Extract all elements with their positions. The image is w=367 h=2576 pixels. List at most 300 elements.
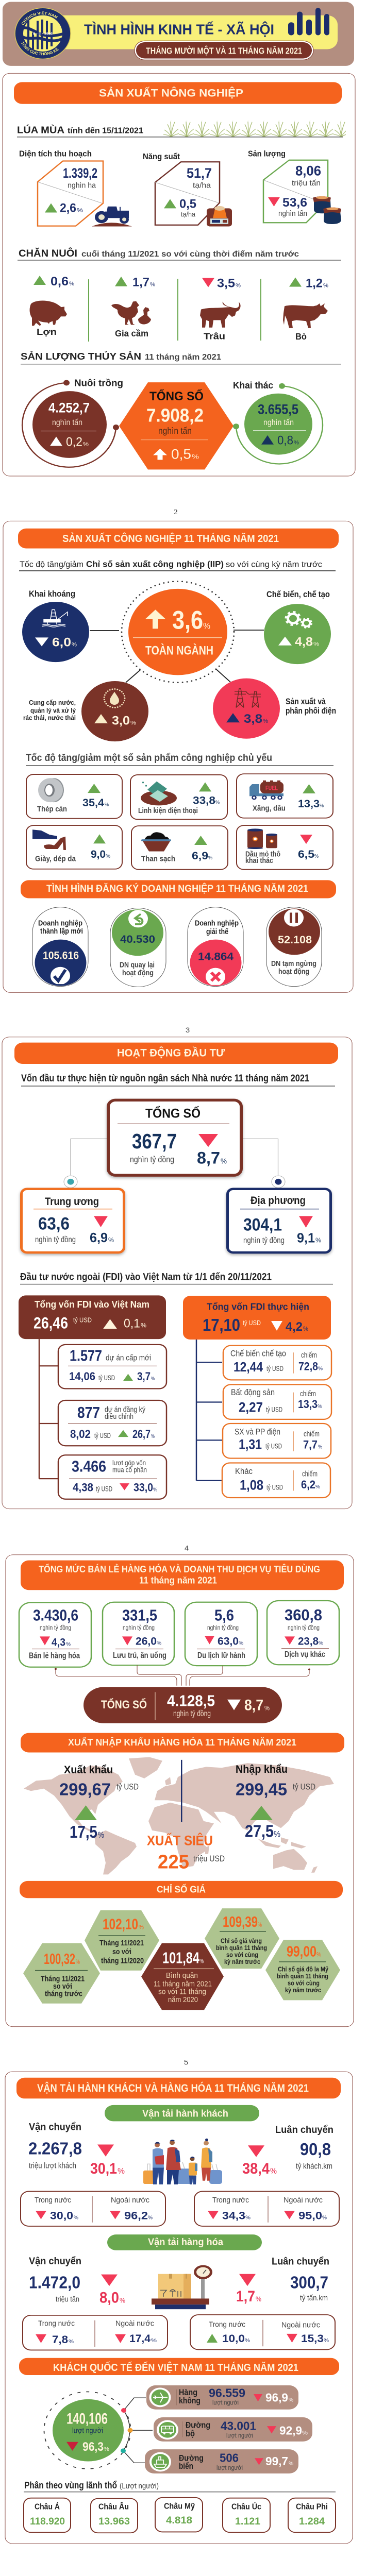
passenger carried: Vận chuyển	[29, 2122, 81, 2132]
FDI card: capital contributions: mua cổ phần	[112, 1466, 147, 1474]
heading: price index	[20, 1881, 343, 1898]
product: crude oil	[237, 825, 333, 870]
icon: cross mark	[206, 968, 225, 985]
product: petroleum: %	[320, 803, 324, 809]
retail card: tourism: 5,6	[214, 1606, 234, 1624]
circle: total visitors: %	[104, 2446, 109, 2452]
livestock: poultry: %	[150, 282, 155, 287]
box: passenger carried breakdown: 96,2	[124, 2209, 148, 2222]
hexagon: USD price: bình quân 11 tháng	[277, 1973, 328, 1980]
retail card: other services: %	[319, 1641, 323, 1646]
total pill: 4.128,5	[167, 1692, 215, 1709]
card: central: 6,9	[90, 1230, 108, 1245]
retail card: accommodation: %	[157, 1641, 161, 1646]
header: realised FDI: %	[303, 1325, 308, 1332]
retail card: accommodation: Lưu trú, ăn uống	[113, 1651, 166, 1660]
subtitle pill	[135, 41, 313, 60]
passenger traffic: tỷ khách.km	[296, 2162, 332, 2171]
circle: total visitors: 96,3	[82, 2440, 104, 2454]
icon: shoes	[32, 829, 66, 850]
heading: international visitors: KHÁCH QUỐC TẾ ĐẾN VIỆT NAM 11 THÁNG NĂM 2021	[53, 2361, 298, 2374]
hexagon: gold price: bình quân 11 tháng	[216, 1944, 267, 1952]
freight carried: triệu tấn	[56, 2295, 79, 2304]
connector node right	[272, 1176, 285, 1188]
header: total FDI: 0,1	[124, 1317, 140, 1330]
capture fisheries circle: Khai thác	[233, 381, 273, 391]
icon: plane	[149, 2387, 171, 2407]
product: leather footwear: Giày, dép da	[35, 855, 76, 863]
card: local: 304,1	[243, 1214, 282, 1234]
retail card: other services	[267, 1601, 339, 1665]
heading: fisheries: 11 tháng năm 2021	[145, 353, 221, 362]
card: output: 53,6	[282, 196, 307, 209]
card: output: triệu tấn	[292, 179, 321, 188]
FDI sector: other	[222, 1463, 330, 1498]
capsule: dissolved enterprises: giải thể	[206, 928, 228, 936]
circle: water and waste: 3,0	[112, 714, 130, 727]
exports	[59, 1763, 139, 1842]
capsule: re-activated enterprises	[110, 908, 166, 987]
product: rolled steel: 35,4	[82, 796, 104, 809]
heading: agriculture: SẢN XUẤT NÔNG NGHIỆP	[99, 86, 243, 99]
product: leather footwear: %	[106, 854, 110, 859]
capture fisheries circle: %	[294, 440, 299, 446]
center circle: whole industry: TOÀN NGÀNH	[145, 643, 213, 657]
product: petroleum	[237, 774, 333, 818]
passenger carried: %	[118, 2167, 125, 2176]
hexagon: CPI average: 11 tháng năm 2021	[154, 1980, 212, 1988]
passenger traffic: Luân chuyển	[275, 2124, 333, 2136]
region: America: Châu Mỹ	[164, 2502, 195, 2511]
title: TÌNH HÌNH KINH TẾ - XÃ HỘI	[84, 21, 274, 38]
pill: freight transport: Vận tải hàng hóa	[148, 2236, 223, 2248]
icon: statistics office logo: TỔNG CỤC THỐNG KÊ	[21, 41, 59, 56]
livestock: cattle: Bò	[295, 332, 307, 342]
icon: bar chart	[288, 8, 329, 35]
circle: electricity: %	[263, 719, 268, 724]
card: output: Sản lượng	[248, 149, 286, 158]
FDI sector: real estate	[223, 1384, 331, 1419]
freight carried: 1.472,0	[29, 2273, 80, 2292]
circle: mining: Khai khoáng	[29, 589, 75, 599]
capsule: re-activated enterprises: hoạt động	[122, 969, 154, 977]
capsule: suspended enterprises	[266, 907, 322, 987]
hexagon: USD price: %	[316, 1951, 321, 1958]
region: Africa: 1.284	[299, 2516, 325, 2527]
livestock: poultry: 1,7	[132, 276, 149, 289]
bar: air: Hàng	[179, 2388, 197, 2397]
livestock: pigs	[30, 275, 74, 337]
box: passenger traffic breakdown: %	[322, 2215, 327, 2221]
region: Africa: Châu Phi	[296, 2502, 328, 2511]
FDI sector: electricity: tỷ USD	[265, 1443, 282, 1450]
heading: business registration: TÌNH HÌNH ĐĂNG KÝ DOANH NGHIỆP 11 THÁNG NĂM 2021	[46, 883, 308, 894]
FDI card: capital contributions	[58, 1455, 166, 1499]
retail card: other services: 360,8	[285, 1606, 322, 1623]
heading: industry: SẢN XUẤT CÔNG NGHIỆP 11 THÁNG NĂM 2021	[62, 532, 279, 545]
circle: electricity: phân phối điện	[286, 706, 336, 716]
center circle: whole industry	[122, 581, 234, 683]
circle: manufacturing: %	[313, 641, 319, 647]
heading: fisheries	[21, 350, 341, 364]
capsule: new enterprises	[32, 907, 88, 987]
freight traffic: Luân chuyển	[272, 2256, 329, 2267]
heading: livestock	[18, 247, 341, 261]
heading: by region	[24, 2481, 336, 2492]
heading: business registration	[21, 880, 336, 899]
header: realised FDI: tỷ USD	[243, 1319, 261, 1327]
trade surplus	[147, 1833, 225, 1873]
page number 4: 4	[185, 1545, 189, 1553]
FDI card: adjusted projects: điều chỉnh	[105, 1413, 134, 1421]
total pill: nghìn tỷ đồng	[173, 1709, 211, 1718]
imports: tỷ USD	[293, 1782, 315, 1791]
FDI sector: real estate: 13,3	[298, 1398, 318, 1411]
subtitle: IIP: Chỉ số sản xuất công nghiệp (IIP)	[86, 560, 224, 569]
FDI card: new projects: 1.577	[70, 1347, 102, 1364]
icon: buffalo	[200, 301, 241, 328]
hexagon: CPI month on month: %	[76, 1959, 80, 1965]
product: petroleum: Xăng, dầu	[253, 804, 286, 812]
box: passenger traffic breakdown: 34,3	[222, 2209, 245, 2222]
card: output	[248, 149, 341, 224]
FDI sector: real estate: tỷ USD	[266, 1406, 282, 1414]
box: freight traffic breakdown: Ngoài nước	[281, 2321, 320, 2329]
retail card: accommodation	[103, 1602, 174, 1665]
imports: Nhập khẩu	[236, 1762, 288, 1775]
freight carried: 8,0	[99, 2289, 119, 2306]
bar: road: bộ	[186, 2429, 195, 2438]
FDI sector: electricity: %	[318, 1445, 322, 1450]
card: total investment: 8,7	[197, 1149, 220, 1167]
bar: road: 43.001	[221, 2419, 256, 2433]
region: Europe	[91, 2499, 138, 2533]
total pill	[84, 1687, 282, 1723]
header: total FDI: Tổng vốn FDI vào Việt Nam	[35, 1299, 149, 1310]
FDI sector: electricity: 7,7	[303, 1438, 318, 1451]
livestock: buffalo: %	[236, 283, 241, 289]
card: local: 9,1	[297, 1230, 315, 1245]
FDI sector: real estate: %	[318, 1404, 322, 1410]
retail card: goods: 3.430,6	[33, 1606, 78, 1624]
product: phone components: Linh kiện điện thoại	[138, 807, 198, 815]
livestock: pigs: %	[69, 281, 74, 287]
heading: retail	[21, 1561, 344, 1590]
total hexagon: 0,5	[171, 447, 191, 462]
passenger traffic	[242, 2124, 333, 2177]
FDI card: adjusted projects	[58, 1400, 166, 1446]
icon: parcel on platform scale	[152, 2265, 212, 2309]
FDI sector: electricity: SX và PP điện	[235, 1427, 280, 1436]
total hexagon: %	[192, 453, 199, 461]
card: yield: 51,7	[187, 165, 212, 181]
livestock: buffalo: Trâu	[204, 331, 225, 341]
passenger carried	[28, 2122, 125, 2177]
trade surplus: triệu USD	[193, 1854, 225, 1863]
card: total investment	[108, 1100, 241, 1175]
FDI sector: other: 1,08	[240, 1478, 263, 1493]
product: leather footwear: 9,0	[91, 848, 106, 860]
circle: manufacturing: Chế biến, chế tạo	[266, 590, 330, 599]
header: total FDI: %	[141, 1322, 146, 1329]
capsule: dissolved enterprises: Doanh nghiệp	[195, 919, 239, 927]
card: yield: 0,5	[179, 197, 196, 211]
exports: 17,5	[70, 1823, 97, 1842]
hexagon: gold price: 109,39	[223, 1914, 258, 1930]
hexagon: CPI month on month: tháng trước	[45, 1990, 82, 1998]
passenger traffic: 90,8	[300, 2140, 331, 2159]
bar: road: 92,9	[279, 2424, 302, 2437]
pill: passenger transport: Vận tải hành khách	[142, 2108, 228, 2119]
circle: manufacturing	[264, 590, 331, 664]
retail card: tourism: Du lịch lữ hành	[197, 1651, 245, 1660]
retail card: tourism: nghìn tỷ đồng	[207, 1624, 239, 1632]
livestock: pigs: 0,6	[51, 275, 69, 289]
connector lines	[123, 2398, 153, 2463]
aquaculture circle: 0,2	[66, 435, 82, 449]
FDI card: capital contributions: 4,38	[73, 1481, 93, 1494]
hexagon: CPI year on year: tháng 11/2020	[101, 1957, 144, 1965]
capsule: new enterprises: 105.616	[43, 949, 79, 961]
heading: industry	[18, 529, 339, 548]
icon: coal bowl	[141, 832, 171, 852]
hexagon: CPI year on year: %	[139, 1924, 144, 1930]
FDI card: adjusted projects: dự án đăng ký	[105, 1405, 145, 1414]
capsule: re-activated enterprises: DN quay lại	[120, 961, 155, 969]
aquaculture circle: 4.252,7	[48, 400, 90, 416]
bar: air: lượt người	[212, 2399, 239, 2406]
exports: tỷ USD	[116, 1782, 139, 1791]
product: rolled steel: %	[105, 803, 109, 808]
product: phone components	[130, 775, 227, 819]
livestock: cattle: 1,2	[306, 277, 323, 290]
bar: sea: Đường	[179, 2453, 204, 2463]
box: passenger traffic breakdown: Trong nước	[212, 2196, 249, 2205]
panel: investment	[2, 1037, 352, 1509]
hexagon: CPI average: %	[200, 1958, 204, 1964]
circle: mining: %	[72, 642, 77, 648]
subtitle pill: THÁNG MƯỜI MỘT VÀ 11 THÁNG NĂM 2021	[146, 45, 302, 56]
icon: return arrow	[128, 910, 148, 927]
product: rolled steel: Thép cán	[37, 805, 67, 814]
imports: %	[274, 1829, 280, 1839]
bar: sea: 99,7	[265, 2455, 288, 2468]
retail card: goods	[19, 1603, 91, 1667]
FDI sector: real estate: Bất động sản	[231, 1388, 275, 1397]
circle: total visitors	[44, 2392, 131, 2469]
FDI sector: manufacturing: 12,44	[233, 1359, 263, 1375]
hexagon: CPI year on year: Tháng 11/2021	[99, 1939, 144, 1947]
icon: rice sacks	[313, 196, 341, 224]
hexagon: USD price	[265, 1940, 340, 2000]
card: total investment: %	[221, 1157, 227, 1165]
capsule: re-activated enterprises: 40.530	[120, 933, 155, 945]
circle: mining	[22, 589, 89, 662]
capsule: new enterprises: Doanh nghiệp	[38, 919, 82, 927]
icon: statistics office logo: CHXHCN VIỆT NAM	[22, 11, 58, 25]
panel: agriculture	[3, 73, 355, 476]
retail card: tourism: %	[239, 1641, 243, 1646]
FDI sector: manufacturing: tỷ USD	[266, 1365, 283, 1373]
circle: water and waste: Cung cấp nước,	[29, 699, 76, 706]
card: yield	[143, 152, 232, 226]
bar: air: 96.559	[209, 2387, 245, 2400]
total pill: TỔNG SỐ	[101, 1698, 147, 1711]
hexagon: USD price: kỳ năm trước	[285, 1987, 321, 1994]
region: Oceania: Châu Úc	[231, 2502, 261, 2511]
FDI card: capital contributions: 3.466	[72, 1458, 106, 1475]
bar: road: Đường	[186, 2421, 210, 2430]
card: central: %	[108, 1236, 114, 1244]
icon: water drop	[104, 689, 125, 707]
bar: air: không	[179, 2396, 201, 2405]
hexagon: CPI month on month: so với	[53, 1982, 72, 1991]
aquaculture circle	[22, 378, 123, 467]
product: crude oil: khai thác	[245, 857, 273, 865]
FDI card: new projects	[58, 1345, 166, 1388]
card: total investment: 367,7	[132, 1130, 177, 1153]
region: Africa	[288, 2498, 336, 2532]
pill: freight transport	[107, 2234, 262, 2250]
hexagon: gold price: %	[258, 1922, 262, 1928]
panel: trade and prices	[6, 1555, 354, 2027]
panel: industry	[3, 521, 353, 992]
circle: total visitors: lượt người	[72, 2427, 103, 2435]
exports: 299,67	[59, 1780, 111, 1799]
retail card: other services: 23,8	[298, 1635, 319, 1647]
aquaculture circle: Nuôi trồng	[74, 378, 123, 388]
hexagon: CPI average: Bình quân	[166, 1972, 198, 1980]
product: leather footwear	[26, 825, 122, 869]
heading: rice: LÚA MÙA	[17, 124, 64, 135]
box: passenger traffic breakdown: %	[245, 2215, 251, 2221]
card: output: 8,06	[295, 163, 321, 179]
hexagon: CPI average: năm 2020	[168, 1996, 198, 2004]
FDI card: capital contributions: lượt góp vốn	[112, 1460, 146, 1467]
region: Europe: Châu Âu	[98, 2502, 129, 2511]
circle: mining: 6,0	[52, 636, 71, 649]
header: realised FDI: 4,2	[286, 1320, 303, 1334]
heading: international visitors	[19, 2358, 339, 2375]
heading: fisheries: SẢN LƯỢNG THỦY SẢN	[21, 350, 141, 362]
retail card: other services: Dịch vụ khác	[285, 1650, 325, 1659]
hexagon: CPI month on month: Tháng 11/2021	[41, 1975, 85, 1983]
icon: fuel truck: FUEL	[265, 785, 278, 792]
heading: by region: (Lượt người)	[120, 2482, 159, 2490]
card: central: 63,6	[38, 1213, 70, 1233]
capture fisheries circle: 3.655,5	[258, 402, 298, 417]
product: phone components: 33,8	[193, 794, 215, 806]
icon: circuit boards	[141, 782, 177, 805]
box: passenger carried breakdown: Ngoài nước	[111, 2196, 149, 2205]
total hexagon: nghìn tấn	[158, 426, 192, 436]
center circle: whole industry: %	[203, 621, 210, 631]
hexagon: gold price	[205, 1908, 279, 1969]
FDI card: new projects: dự án cấp mới	[106, 1353, 151, 1362]
freight traffic: 1,7	[236, 2287, 255, 2304]
freight carried: %	[120, 2297, 125, 2304]
icon: travellers with luggage	[143, 2139, 222, 2184]
icon: pig	[30, 301, 67, 326]
retail card: tourism: 63,0	[218, 1635, 239, 1647]
card: harvested area: 1.339,2	[63, 165, 97, 181]
box: passenger carried breakdown	[21, 2191, 165, 2226]
heading: transport	[16, 2078, 341, 2098]
card: harvested area: nghìn ha	[68, 181, 96, 190]
FDI card: capital contributions: tỷ USD	[96, 1485, 112, 1493]
bar: air	[146, 2385, 298, 2410]
FDI sector: manufacturing: %	[318, 1366, 323, 1371]
bar: sea: %	[289, 2461, 293, 2467]
retail card: goods: 4,3	[52, 1635, 65, 1648]
FDI card: new projects: 3,7	[137, 1370, 151, 1383]
icon: gears	[286, 612, 311, 628]
heading: livestock: CHĂN NUÔI	[19, 247, 77, 259]
box: freight carried breakdown: Ngoài nước	[115, 2319, 154, 2328]
card: harvested area: 2,6	[60, 201, 76, 215]
card: yield: Năng suất	[143, 152, 180, 161]
hexagon: gold price: Chỉ số giá vàng	[221, 1937, 262, 1944]
capture fisheries circle	[233, 381, 323, 464]
livestock: pigs: Lợn	[37, 327, 57, 337]
icon: rooster and duck	[111, 301, 151, 325]
bar: road: %	[302, 2430, 308, 2436]
product: petroleum: 13,3	[298, 797, 320, 810]
retail card: tourism	[185, 1602, 257, 1666]
total hexagon: 7.908,2	[146, 405, 204, 426]
card: yield: tạ/ha	[193, 181, 211, 190]
retail card: other services: nghìn tỷ đồng	[288, 1624, 320, 1632]
card: total investment: TỔNG SỐ	[145, 1106, 201, 1121]
icon: tractor	[92, 207, 132, 226]
FDI sector: other: chiếm	[302, 1470, 318, 1478]
circle: electricity: 3,8	[244, 712, 262, 726]
circle: electricity: Sản xuất và	[286, 697, 326, 706]
FDI card: adjusted projects: 877	[77, 1404, 100, 1421]
box: passenger carried breakdown: %	[74, 2215, 78, 2221]
retail card: accommodation: 26,0	[136, 1635, 157, 1647]
box: passenger traffic breakdown: Ngoài nước	[283, 2196, 323, 2205]
world map	[24, 1757, 334, 1874]
hexagon: CPI year on year	[85, 1910, 159, 1971]
FDI card: new projects: %	[151, 1377, 155, 1382]
box: freight traffic breakdown: 15,3	[301, 2332, 324, 2345]
product: clean coal: %	[208, 855, 212, 861]
icon: oil barrels	[247, 828, 277, 849]
box: passenger traffic breakdown	[194, 2191, 339, 2226]
arrows: retail components to total	[55, 1665, 310, 1686]
region: America	[155, 2498, 203, 2532]
subtitle: IIP: so với cùng kỳ năm trước	[226, 560, 322, 569]
bar: sea	[145, 2449, 298, 2473]
icon: statistics office logo	[14, 7, 71, 59]
box: freight traffic breakdown	[190, 2315, 335, 2350]
passenger traffic: %	[270, 2167, 277, 2176]
product: clean coal: 6,9	[192, 849, 208, 862]
icon: cow	[283, 303, 328, 328]
card: central: nghìn tỷ đồng	[35, 1235, 76, 1244]
panel: transport and tourism	[5, 2072, 353, 2544]
hexagon: USD price: so với cùng	[288, 1979, 320, 1987]
circle: electricity	[213, 679, 336, 739]
heading: rice: tính đến 15/11/2021	[68, 126, 143, 135]
card: local: %	[315, 1236, 321, 1244]
card: harvested area: %	[77, 208, 83, 213]
FDI sector: manufacturing	[223, 1346, 331, 1380]
card: local	[228, 1189, 331, 1252]
capsule: dissolved enterprises	[188, 907, 243, 987]
aquaculture circle: nghìn tấn	[52, 418, 82, 427]
